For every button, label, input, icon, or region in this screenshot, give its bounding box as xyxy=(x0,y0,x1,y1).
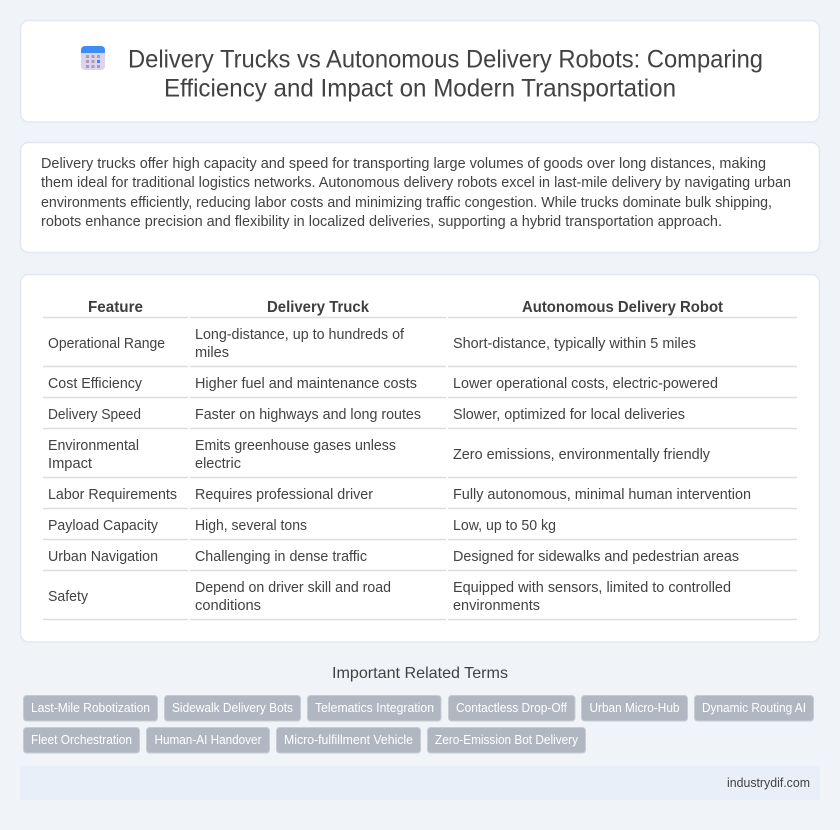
row: labor requirements: Requires professional driver xyxy=(195,487,373,503)
row: safety: environments xyxy=(453,598,540,614)
row: safety: conditions xyxy=(195,598,261,614)
row: operational range: Short-distance, typically within 5 miles xyxy=(453,336,696,352)
tags: related terms: Urban Micro-Hub xyxy=(590,701,680,715)
row: urban navigation xyxy=(48,549,739,565)
tags: related terms: Zero-Emission Bot Delivery xyxy=(435,733,579,747)
footer: industrydif.com xyxy=(727,776,810,790)
row: environmental impact xyxy=(48,438,711,472)
tags: related terms: Telematics Integration xyxy=(315,701,434,715)
row: urban navigation: Designed for sidewalks and pedestrian areas xyxy=(453,549,739,565)
panel: intro text: robots enhance precision and flexibility in localized deliveries, supporting a hybrid transportation approach. xyxy=(41,214,722,230)
row: environmental impact: Emits greenhouse gases unless xyxy=(195,438,396,454)
title: Efficiency and Impact on Modern Transportation xyxy=(164,74,676,102)
tags: related terms: Micro-fulfillment Vehicle xyxy=(284,733,413,747)
row: safety: Safety xyxy=(48,589,89,605)
table header xyxy=(88,299,724,316)
panel: title card xyxy=(20,20,820,122)
footer xyxy=(20,766,820,800)
row: operational range xyxy=(48,327,696,361)
row: operational range: Operational Range xyxy=(48,336,165,352)
row: delivery speed: Faster on highways and long routes xyxy=(195,407,421,423)
row: safety xyxy=(48,580,731,614)
row: safety: Depend on driver skill and road xyxy=(195,580,391,596)
tags: related terms: Sidewalk Delivery Bots xyxy=(172,701,293,715)
row: payload capacity: High, several tons xyxy=(195,518,307,534)
row: operational range: miles xyxy=(195,345,229,361)
row: delivery speed: Delivery Speed xyxy=(48,407,141,423)
row: payload capacity: Low, up to 50 kg xyxy=(453,518,556,534)
tags: related terms: Last-Mile Robotization xyxy=(31,701,150,715)
panel: intro text xyxy=(20,142,820,252)
row: labor requirements: Labor Requirements xyxy=(48,487,177,503)
table header: Delivery Truck xyxy=(267,299,369,316)
title xyxy=(128,46,763,102)
row: environmental impact: Zero emissions, environmentally friendly xyxy=(453,447,711,463)
row: labor requirements xyxy=(48,487,751,503)
row: cost efficiency: Cost Efficiency xyxy=(48,376,143,392)
panel: intro text: environments efficiently, reducing labor costs and minimizing traffic congestion. While trucks dominate bulk shipping, xyxy=(41,195,772,211)
row: environmental impact: electric xyxy=(195,456,241,472)
row: urban navigation: Urban Navigation xyxy=(48,549,158,565)
row: cost efficiency xyxy=(48,376,718,392)
row: payload capacity: Payload Capacity xyxy=(48,518,159,534)
row: payload capacity xyxy=(48,518,556,534)
row: environmental impact: Impact xyxy=(48,456,92,472)
row: delivery speed: Slower, optimized for local deliveries xyxy=(453,407,685,423)
row: labor requirements: Fully autonomous, minimal human intervention xyxy=(453,487,751,503)
row: cost efficiency: Higher fuel and maintenance costs xyxy=(195,376,417,392)
row: safety: Equipped with sensors, limited to controlled xyxy=(453,580,731,596)
tags: related terms xyxy=(24,696,814,753)
tags: related terms: Contactless Drop-Off xyxy=(456,701,567,715)
table header: Autonomous Delivery Robot xyxy=(522,299,724,316)
row: cost efficiency: Lower operational costs, electric-powered xyxy=(453,376,718,392)
table header: Feature xyxy=(88,299,143,316)
row: operational range: Long-distance, up to hundreds of xyxy=(195,327,405,343)
row: delivery speed xyxy=(48,407,685,423)
row: environmental impact: Environmental xyxy=(48,438,139,454)
tags: related terms: Fleet Orchestration xyxy=(31,733,132,747)
tags: related terms: Dynamic Routing AI xyxy=(702,701,806,715)
row: urban navigation: Challenging in dense traffic xyxy=(195,549,367,565)
panel: intro text: Delivery trucks offer high capacity and speed for transporting large volumes of goods over long distances, making xyxy=(41,156,766,172)
title: Delivery Trucks vs Autonomous Delivery Robots: Comparing xyxy=(128,46,763,74)
heading: important related terms: Important Related Terms xyxy=(332,665,508,682)
panel: comparison table xyxy=(20,274,820,642)
tags: related terms: Human-AI Handover xyxy=(154,733,262,747)
icon: calendar xyxy=(81,46,105,70)
panel: intro text: them ideal for traditional logistics networks. Autonomous delivery robots excel in last-mile delivery by navigating urban xyxy=(41,175,791,191)
